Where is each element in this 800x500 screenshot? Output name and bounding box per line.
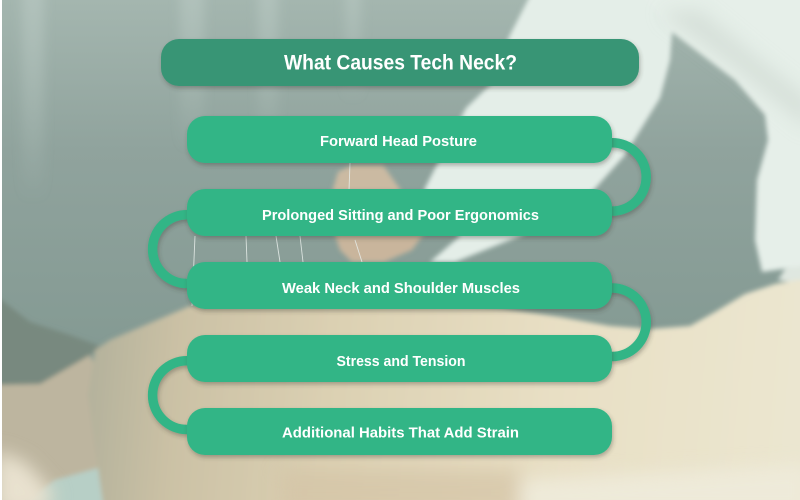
- connector: step 1 to step 2: [605, 143, 646, 211]
- connector: step 2 to step 3: [153, 215, 194, 284]
- curtain folds: [22, 0, 361, 200]
- step 5: additional habits: [187, 408, 612, 455]
- left page strip: [0, 0, 2, 500]
- step 5: additional habits: Additional Habits That Add Strain: [282, 424, 519, 442]
- step 1: forward head posture: Forward Head Posture: [320, 133, 477, 150]
- step 3: weak muscles: [187, 262, 612, 309]
- sheet: [15, 468, 104, 500]
- step 2: prolonged sitting: [187, 189, 612, 236]
- patient back: [88, 278, 800, 500]
- patient neck: [0, 355, 110, 500]
- hand: lower: [334, 232, 425, 262]
- step 4: stress and tension: [187, 335, 612, 382]
- therapist coat: sleeve: [424, 0, 672, 262]
- connector: step 3 to step 4: [605, 288, 646, 356]
- hair: [0, 295, 100, 392]
- step 2: prolonged sitting: Prolonged Sitting and Poor Ergonomics: [262, 207, 539, 224]
- title banner: What Causes Tech Neck?: [284, 52, 517, 74]
- step 4: stress and tension: Stress and Tension: [336, 353, 466, 370]
- hand: upper: [332, 165, 402, 192]
- therapist coat: torso: [640, 0, 800, 272]
- connector: step 4 to step 5: [153, 361, 194, 430]
- acupuncture needles: [192, 163, 362, 306]
- connector arcs: [153, 143, 646, 429]
- title banner: [161, 39, 639, 86]
- towel: [778, 264, 800, 285]
- step 1: forward head posture: [187, 116, 612, 163]
- step 3: weak muscles: Weak Neck and Shoulder Muscles: [282, 280, 520, 297]
